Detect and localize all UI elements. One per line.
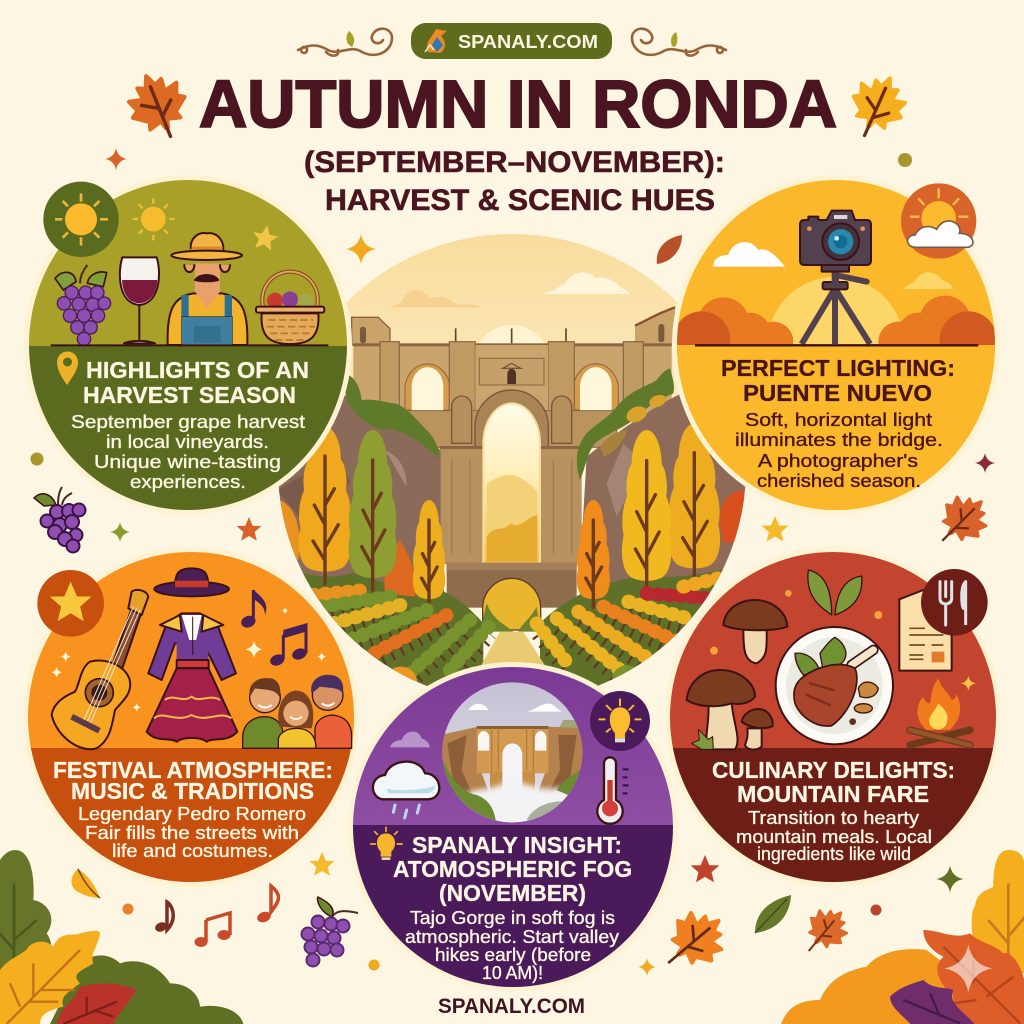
sky [344, 234, 679, 464]
heading [721, 355, 955, 406]
icon: small sun [133, 198, 175, 240]
icon: sun and cloud badge [901, 183, 976, 259]
panel: spanaly insight [345, 660, 685, 995]
icon: thermometer [597, 757, 629, 824]
body text: September grape harvest [71, 412, 305, 432]
icon: small bulb [371, 827, 402, 860]
icon: sparkles [51, 607, 326, 712]
body text: mountain meals. Local [736, 827, 932, 847]
panel: festival atmosphere [20, 545, 365, 888]
heading [83, 357, 309, 408]
logo icon [425, 29, 447, 53]
body text: ingredients like wild [757, 844, 911, 864]
icon: plate with roast [776, 627, 893, 744]
dots [710, 590, 976, 691]
ground line [695, 342, 978, 349]
leaf: title right yellow [841, 68, 914, 146]
heading: PERFECT LIGHTING: [721, 355, 955, 381]
grapes: left [34, 487, 86, 552]
heading: ATOMOSPHERIC FOG [393, 856, 632, 882]
body text: Unique wine-tasting [94, 452, 281, 472]
ground and shrubs [280, 490, 744, 686]
icon: fork and knife badge [921, 569, 988, 636]
small falling yellow leaf [72, 869, 100, 898]
heading: FESTIVAL ATMOSPHERE: [53, 757, 333, 783]
subtitle line 2: HARVEST & SCENIC HUES [325, 184, 715, 217]
body text: in local vineyards. [106, 432, 269, 452]
heading [393, 832, 632, 906]
icon: menu card [899, 590, 952, 671]
music notes row [154, 886, 279, 947]
body text: Tajo Gorge in soft fog is [410, 908, 615, 928]
body text [736, 808, 932, 864]
decorative sparkles, stars and dots [30, 148, 995, 976]
icon: star badge [37, 570, 104, 637]
icon: guitar [52, 590, 148, 749]
header ornaments: left flourish [298, 29, 392, 56]
heading: PUENTE NUEVO [743, 380, 932, 406]
leaf: title left maple [120, 66, 196, 147]
vineyard rows [311, 571, 722, 682]
body text: A photographer's [758, 451, 918, 471]
body text: hikes early (before [435, 945, 591, 965]
icon: pale cloud [390, 732, 430, 747]
icon: basket [256, 272, 324, 344]
panel: harvest highlights [20, 170, 360, 516]
icon: three smiling people [243, 675, 352, 748]
cliff right [577, 368, 753, 607]
body text: cherished season. [757, 471, 921, 491]
body text [71, 412, 305, 492]
icons: sun, grapes, wine, farmer, basket [43, 182, 328, 346]
body text: experiences. [130, 472, 246, 492]
icon: herb sprig [808, 570, 862, 615]
icon: flamenco costume [147, 613, 237, 742]
body text [735, 410, 943, 491]
icon: rain cloud [373, 762, 439, 818]
heading: MUSIC & TRADITIONS [71, 778, 314, 804]
foliage: bottom left [0, 850, 243, 1024]
foliage: bottom right [780, 850, 1024, 1024]
grapes: bottom [302, 897, 358, 966]
leaf: maple orange [652, 901, 735, 983]
body text: Transition to hearty [748, 808, 919, 828]
panel: culinary delights [660, 545, 1005, 888]
clouds [713, 242, 953, 289]
icon: grapes [55, 265, 111, 346]
panel: central bridge scene [278, 234, 746, 686]
logo pill [411, 23, 612, 59]
icon: wine glass [120, 257, 159, 343]
heading: SPANALY INSIGHT: [412, 832, 622, 858]
icon: music notes [240, 590, 308, 668]
body text: illuminates the bridge. [735, 430, 943, 450]
icon: upper mushroom [723, 600, 787, 663]
body text: Legendary Pedro Romero [78, 804, 306, 824]
cliff left [278, 375, 444, 606]
icon: campfire [910, 678, 970, 745]
logo pill: SPANALY.COM [458, 31, 598, 52]
title: AUTUMN IN RONDA [199, 67, 837, 142]
heading [53, 757, 333, 804]
body text: 10 AM)! [482, 963, 543, 983]
icon: camera on tripod [800, 211, 871, 344]
leaf: oak orange [794, 900, 856, 963]
icon: location pin [57, 352, 78, 385]
body text: atmospheric. Start valley [405, 927, 619, 947]
icon: star [250, 223, 280, 251]
leaf: small red near bridge [657, 235, 682, 264]
heading: CULINARY DELIGHTS: [712, 757, 955, 783]
heading: HARVEST SEASON [83, 382, 296, 408]
icon: farmer [168, 233, 247, 345]
body text: Fair fills the streets with [85, 823, 299, 843]
icon: lightbulb badge [590, 691, 650, 751]
header ornaments: right flourish [632, 29, 726, 56]
leaf: green [755, 895, 791, 933]
icon: sun badge [43, 182, 119, 257]
panel: perfect lighting [670, 170, 1010, 520]
body text: Soft, horizontal light [745, 410, 932, 430]
body text [78, 804, 306, 861]
icon: fog gorge vignette [442, 682, 582, 822]
body text: life and costumes. [112, 841, 273, 861]
body text [405, 908, 619, 983]
icon: lower mushrooms [687, 670, 773, 749]
heading: HIGHLIGHTS OF AN [86, 357, 309, 383]
footer brand: SPANALY.COM [438, 995, 585, 1018]
heading: (NOVEMBER) [439, 880, 586, 906]
bridge [352, 307, 675, 630]
heading: MOUNTAIN FARE [737, 781, 929, 807]
heading [712, 757, 955, 807]
icon: cordobes hat [154, 568, 229, 596]
trees [299, 423, 720, 607]
leaf: right orange near panel [927, 486, 997, 556]
ground line [51, 342, 328, 348]
subtitle line 1: (SEPTEMBER–NOVEMBER): [304, 146, 725, 179]
